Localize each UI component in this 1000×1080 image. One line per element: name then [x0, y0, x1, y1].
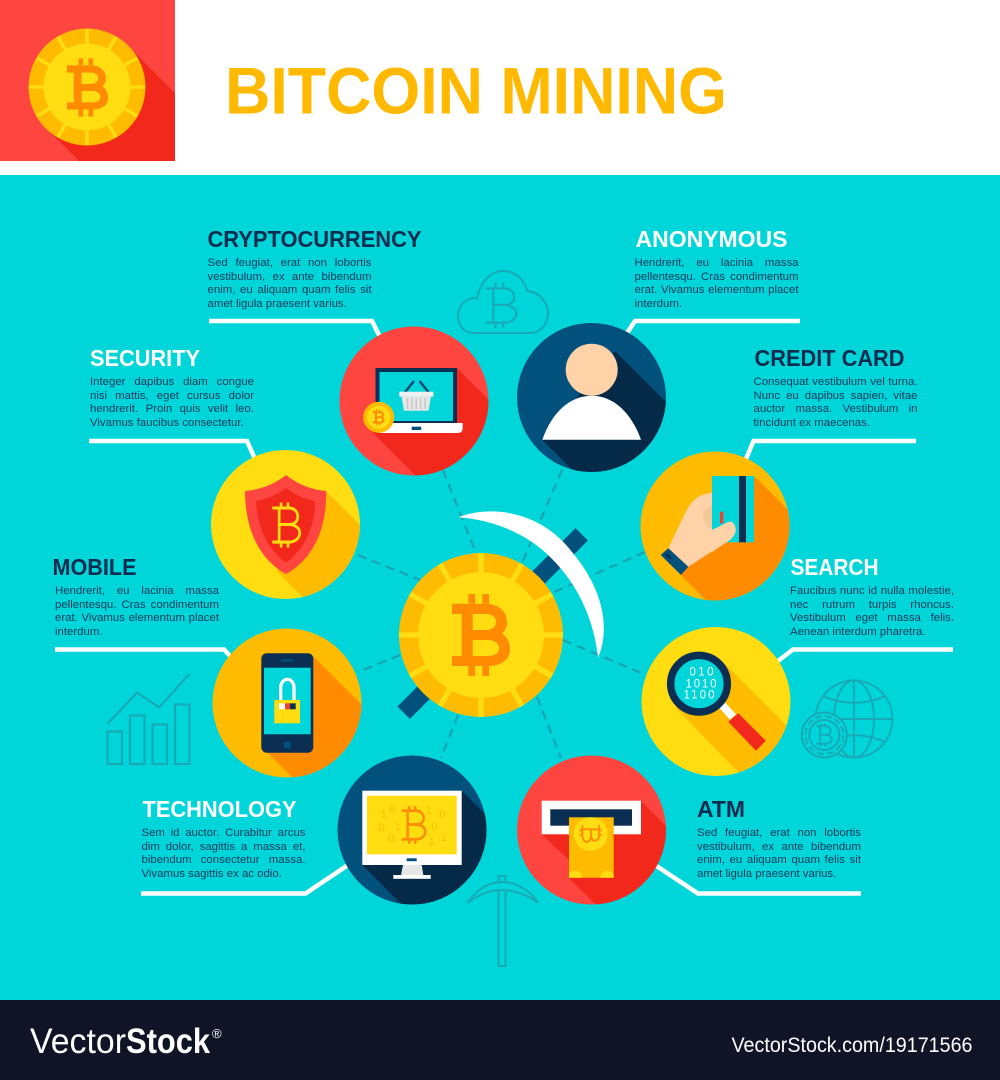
header icon: bitcoin coin on red square — [0, 0, 175, 161]
panel: security — [90, 345, 254, 429]
text: anonymous body: interdum. — [634, 298, 682, 310]
text: technology body: dim dolor, sagittis a massa et, — [142, 841, 306, 853]
footer logo — [30, 1022, 222, 1061]
central pickaxe handle — [404, 534, 582, 713]
icon: credit card in hand — [640, 452, 790, 600]
text: security body — [90, 376, 254, 429]
text: security body: hendrerit. Proin quis velit leo. — [90, 403, 254, 415]
heading: technology: TECHNOLOGY — [142, 796, 296, 822]
icon: cryptocurrency laptop with basket and coin — [340, 326, 488, 476]
text: security body: Vivamus faucibus consectetur. — [90, 417, 244, 429]
text: credit card body: auctor massa. Vestibulum in — [754, 403, 918, 415]
text: mobile body — [55, 585, 219, 638]
icon: technology monitor with bitcoin: 1 — [441, 832, 447, 844]
text: search body: Vestibulum eget massa felis. — [790, 612, 954, 624]
text: atm body: enim, eu aliquam quam felis sit — [697, 854, 861, 866]
text: atm body — [697, 827, 861, 880]
text: technology body: Sem id auctor. Curabitur arcus — [142, 827, 306, 839]
background icon: globe with coin — [802, 680, 892, 758]
panel: mobile — [52, 554, 219, 638]
icon: search magnifier with binary: 1010 — [686, 678, 716, 690]
text: credit card body: Consequat vestibulum vel turna. — [754, 376, 918, 388]
text: search body: Faucibus nunc id nulla molestie, — [790, 585, 954, 597]
text: cryptocurrency body: Sed feugiat, erat non lobortis — [208, 257, 372, 269]
icon: technology monitor with bitcoin: 1 — [395, 821, 401, 833]
icon: security shield — [211, 450, 360, 599]
header band — [0, 0, 1000, 175]
text: technology body: bibendum consectetur massa. — [142, 854, 306, 866]
icon: search magnifier with binary — [642, 627, 790, 776]
title: BITCOIN MINING — [225, 54, 727, 128]
text: search body: Aenean interdum pharetra. — [790, 626, 926, 638]
footer bar — [0, 1000, 1000, 1080]
text: atm body: vestibulum, ex ante bibendum — [697, 841, 861, 853]
panel: cryptocurrency — [207, 226, 421, 310]
text: search body — [790, 585, 954, 638]
text: cryptocurrency body — [208, 257, 372, 310]
icon: technology monitor with bitcoin: 0 — [439, 809, 445, 821]
text: credit card body: tincidunt ex maecenas. — [754, 417, 870, 429]
icon: technology monitor with bitcoin — [338, 756, 486, 904]
footer logo: ® — [212, 1026, 222, 1041]
icon: technology monitor with bitcoin: 1 — [381, 809, 387, 821]
panel: search — [790, 554, 954, 638]
text: mobile body: interdum. — [55, 626, 102, 638]
text: cryptocurrency body: enim, eu aliquam quam felis sit — [208, 284, 372, 296]
icon: technology monitor with bitcoin: 0 — [379, 822, 385, 834]
footer image id: VectorStock.com/19171566 — [732, 1034, 972, 1057]
text: atm body: Sed feugiat, erat non lobortis — [697, 827, 861, 839]
heading: cryptocurrency: CRYPTOCURRENCY — [207, 226, 421, 252]
text: mobile body: erat. Vivamus elementum placet — [55, 612, 219, 624]
icon: ATM slot with banknote — [517, 756, 666, 904]
text: security body: nisi mattis, eget cursus dolor — [90, 390, 254, 402]
text: search body: nec rutrum turpis rhoncus. — [790, 599, 954, 611]
text: technology body — [142, 827, 306, 880]
icon: search magnifier with binary: 1100 — [684, 690, 714, 702]
central bitcoin coin — [399, 553, 563, 717]
text: anonymous body — [634, 257, 798, 310]
icon: search magnifier with binary: 010 — [690, 666, 714, 678]
heading: security: SECURITY — [90, 345, 200, 371]
background icon: growth chart — [107, 674, 190, 764]
heading: credit card: CREDIT CARD — [754, 345, 904, 371]
panel: atm — [697, 796, 861, 880]
text: credit card body — [754, 376, 918, 429]
text: anonymous body: Hendrerit, eu lacinia massa — [634, 257, 798, 269]
background icon: bitcoin cloud — [458, 271, 548, 333]
heading: anonymous: ANONYMOUS — [635, 226, 787, 252]
text: anonymous body: pellentesqu. Cras condimentum — [634, 271, 798, 283]
icon: technology monitor with bitcoin: 0 — [431, 821, 437, 833]
icon: anonymous person — [517, 323, 666, 472]
text: credit card body: Nunc eu dapibus sapien, vitae — [754, 390, 918, 402]
heading: atm: ATM — [697, 796, 745, 822]
background icon: pickaxe — [467, 876, 538, 966]
text: atm body: amet ligula praesent varius. — [697, 868, 836, 880]
central pickaxe blade — [458, 511, 604, 658]
dashed spokes — [358, 470, 646, 758]
connector lines — [55, 321, 953, 894]
footer logo: Stock — [126, 1022, 210, 1061]
heading: search: SEARCH — [790, 554, 878, 580]
heading: mobile: MOBILE — [52, 554, 136, 580]
icon: technology monitor with bitcoin: 1 — [429, 836, 435, 848]
text: anonymous body: erat. Vivamus elementum placet — [634, 284, 798, 296]
panel: credit card — [754, 345, 918, 429]
text: mobile body: Hendrerit, eu lacinia massa — [55, 585, 219, 597]
main cyan background — [0, 175, 1000, 1000]
text: security body: Integer dapibus diam congue — [90, 376, 254, 388]
text: cryptocurrency body: vestibulum, ex ante bibendum — [208, 271, 372, 283]
text: mobile body: pellentesqu. Cras condimentum — [55, 599, 219, 611]
icon: technology monitor with bitcoin: 0 — [388, 833, 394, 845]
panel: anonymous — [634, 226, 798, 310]
icon: technology monitor with bitcoin: 1 — [426, 805, 432, 817]
text: technology body: Vivamus sagittis ex ac odio. — [142, 868, 282, 880]
footer logo: Vector — [30, 1022, 126, 1061]
text: cryptocurrency body: amet ligula praesent varius. — [208, 298, 347, 310]
panel: technology — [142, 796, 306, 880]
icon: mobile phone with padlock — [212, 628, 362, 778]
icon: technology monitor with bitcoin: 0 — [390, 803, 396, 815]
